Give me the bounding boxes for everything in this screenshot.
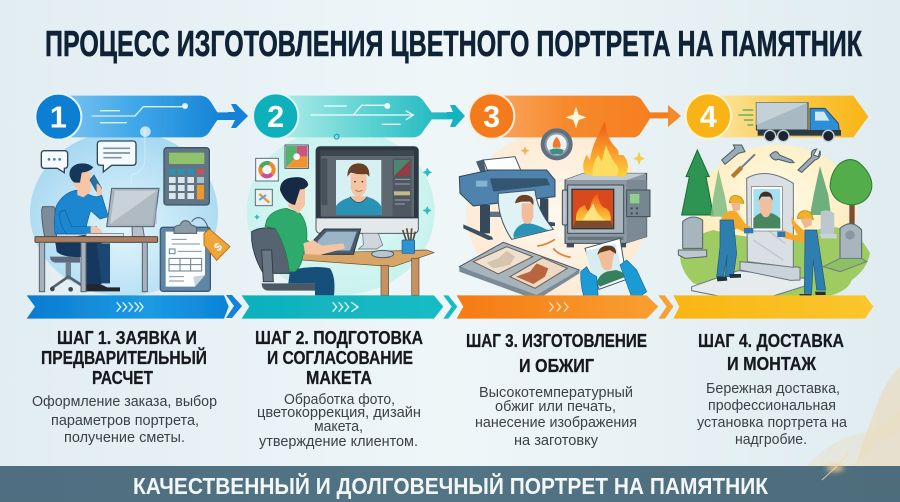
text: step 4: Бережная доставка, [706, 380, 840, 397]
text: step 3: нанесение изображения [475, 414, 637, 431]
background circle 2 [247, 128, 435, 295]
trees [682, 150, 872, 227]
step number 4: 4 [700, 100, 717, 134]
heading: step 4: И МОНТАЖ [727, 354, 817, 374]
sparkle star [565, 107, 587, 128]
heading: step 2: МАКЕТА [306, 368, 372, 388]
text: step 2 [257, 391, 421, 450]
chevron bar 3 [457, 295, 673, 319]
text: step 3: Высокотемпературный [479, 384, 633, 401]
hands holding portrait [581, 238, 647, 305]
heading: step 4: ШАГ 4. ДОСТАВКА [698, 331, 844, 351]
text: step 2: макета, [314, 418, 363, 435]
chevron bar 1 [27, 295, 229, 319]
heading: step 2 [255, 328, 423, 388]
footer glint [822, 454, 848, 480]
desk [301, 250, 434, 295]
sparkles small [520, 146, 645, 165]
header banner 1 [60, 96, 233, 137]
text: step 4: надгробие. [735, 431, 807, 448]
grass ground [680, 227, 870, 301]
heading: step 2: ШАГ 2. ПОДГОТОВКА [255, 328, 423, 348]
text: step 4 [697, 380, 848, 448]
calculator [164, 148, 209, 205]
desk and monitor [35, 188, 159, 292]
sparkles [254, 168, 432, 220]
icon: tools [722, 145, 820, 177]
arrow: step 1 to 2 [228, 104, 248, 128]
heading: step 1: РАСЧЕТ [92, 368, 153, 388]
heading: step 4 [698, 331, 844, 374]
icon: printer with portrait [459, 157, 555, 240]
step number 2 [253, 93, 298, 139]
text: step 3: обжиг или печать, [495, 398, 616, 415]
chevron: step 1 to 2 [226, 295, 242, 318]
arrow: step 3 to 4 [668, 105, 681, 127]
circuit arrows [311, 104, 413, 139]
text: step 1: получение сметы. [64, 429, 185, 446]
panel: step 3 [457, 93, 673, 319]
heading: step 2: И СОГЛАСОВАНИЕ [267, 348, 413, 368]
text: step 4: установка портрета на [697, 414, 848, 431]
step number 4 [686, 93, 731, 139]
heading: step 1: ПРЕДВАРИТЕЛЬНЫЙ [41, 347, 207, 368]
text: step 2: Обработка фото, [284, 391, 395, 408]
small arrows [537, 239, 571, 257]
pencil cup [402, 228, 415, 253]
heading: step 3: ШАГ 3. ИЗГОТОВЛЕНИЕ [466, 331, 647, 351]
monitor stand [358, 233, 383, 249]
text: step 1: Оформление заказа, выбор [32, 393, 217, 410]
background circle 1 [30, 131, 218, 296]
header banner 4 [707, 96, 868, 137]
step number 1: 1 [50, 100, 67, 134]
clipboard with price tag: $ [212, 241, 225, 254]
text: step 1 [32, 393, 217, 446]
tray with portrait plates [459, 242, 579, 300]
panel: step 1 [27, 94, 233, 319]
heading: step 3 [466, 331, 647, 376]
tablet [312, 229, 361, 254]
heading: step 3: И ОБЖИГ [519, 356, 594, 376]
background circle 3 [466, 132, 647, 295]
heading: step 1 [41, 328, 207, 388]
monitor with portrait [316, 147, 418, 233]
person on phone at desk [42, 163, 120, 292]
footer bar [0, 466, 900, 502]
flame on kiln [583, 122, 628, 177]
monument base [692, 271, 805, 303]
arrow: step 2 to 3 [447, 105, 465, 127]
text: step 3: на заготовку [514, 432, 598, 449]
worker left [717, 195, 753, 281]
speech bubble small [41, 151, 68, 173]
icon: kiln with fire [562, 173, 650, 247]
text: step 1: параметров портрета, [51, 412, 199, 429]
chevrons after bar 2 [443, 295, 457, 319]
person at tablet [252, 177, 345, 295]
panel: step 4 [673, 93, 873, 319]
header banner 3 [493, 96, 672, 137]
step number 2: 2 [267, 100, 284, 134]
text: step 4: профессиональная [708, 397, 836, 414]
step number 3: 3 [483, 100, 500, 134]
chevron bar 4 [673, 295, 873, 319]
decorative gold wave [807, 367, 900, 466]
monument stone [740, 174, 800, 280]
heading: step 1: ШАГ 1. ЗАЯВКА И [57, 328, 197, 348]
text: step 2: цветокоррекция, дизайн [257, 404, 421, 421]
text: step 2: утверждение клиентом. [259, 433, 418, 450]
circuit line 1 [92, 104, 187, 183]
panel: step 2 [242, 93, 457, 319]
icon: color palette cards [255, 145, 308, 206]
icon: gear with flame [543, 130, 571, 158]
footer text: КАЧЕСТВЕННЫЙ И ДОЛГОВЕЧНЫЙ ПОРТРЕТ НА ПАМЯТНИК [133, 472, 769, 499]
inner flame [593, 145, 618, 176]
ground circle 4 [697, 145, 857, 272]
chevron bar 2 [242, 295, 443, 319]
tablet screen [317, 232, 357, 251]
step number 1 [35, 94, 81, 140]
side gravestones [678, 210, 867, 272]
text: step 3 [475, 384, 637, 449]
step number 3 [469, 93, 514, 139]
mouse [372, 250, 394, 258]
header banner 2 [273, 96, 457, 137]
speech bubble large [97, 141, 136, 172]
clipboard with price tag [160, 218, 230, 291]
worker right [777, 211, 826, 298]
icon: truck [738, 103, 841, 142]
